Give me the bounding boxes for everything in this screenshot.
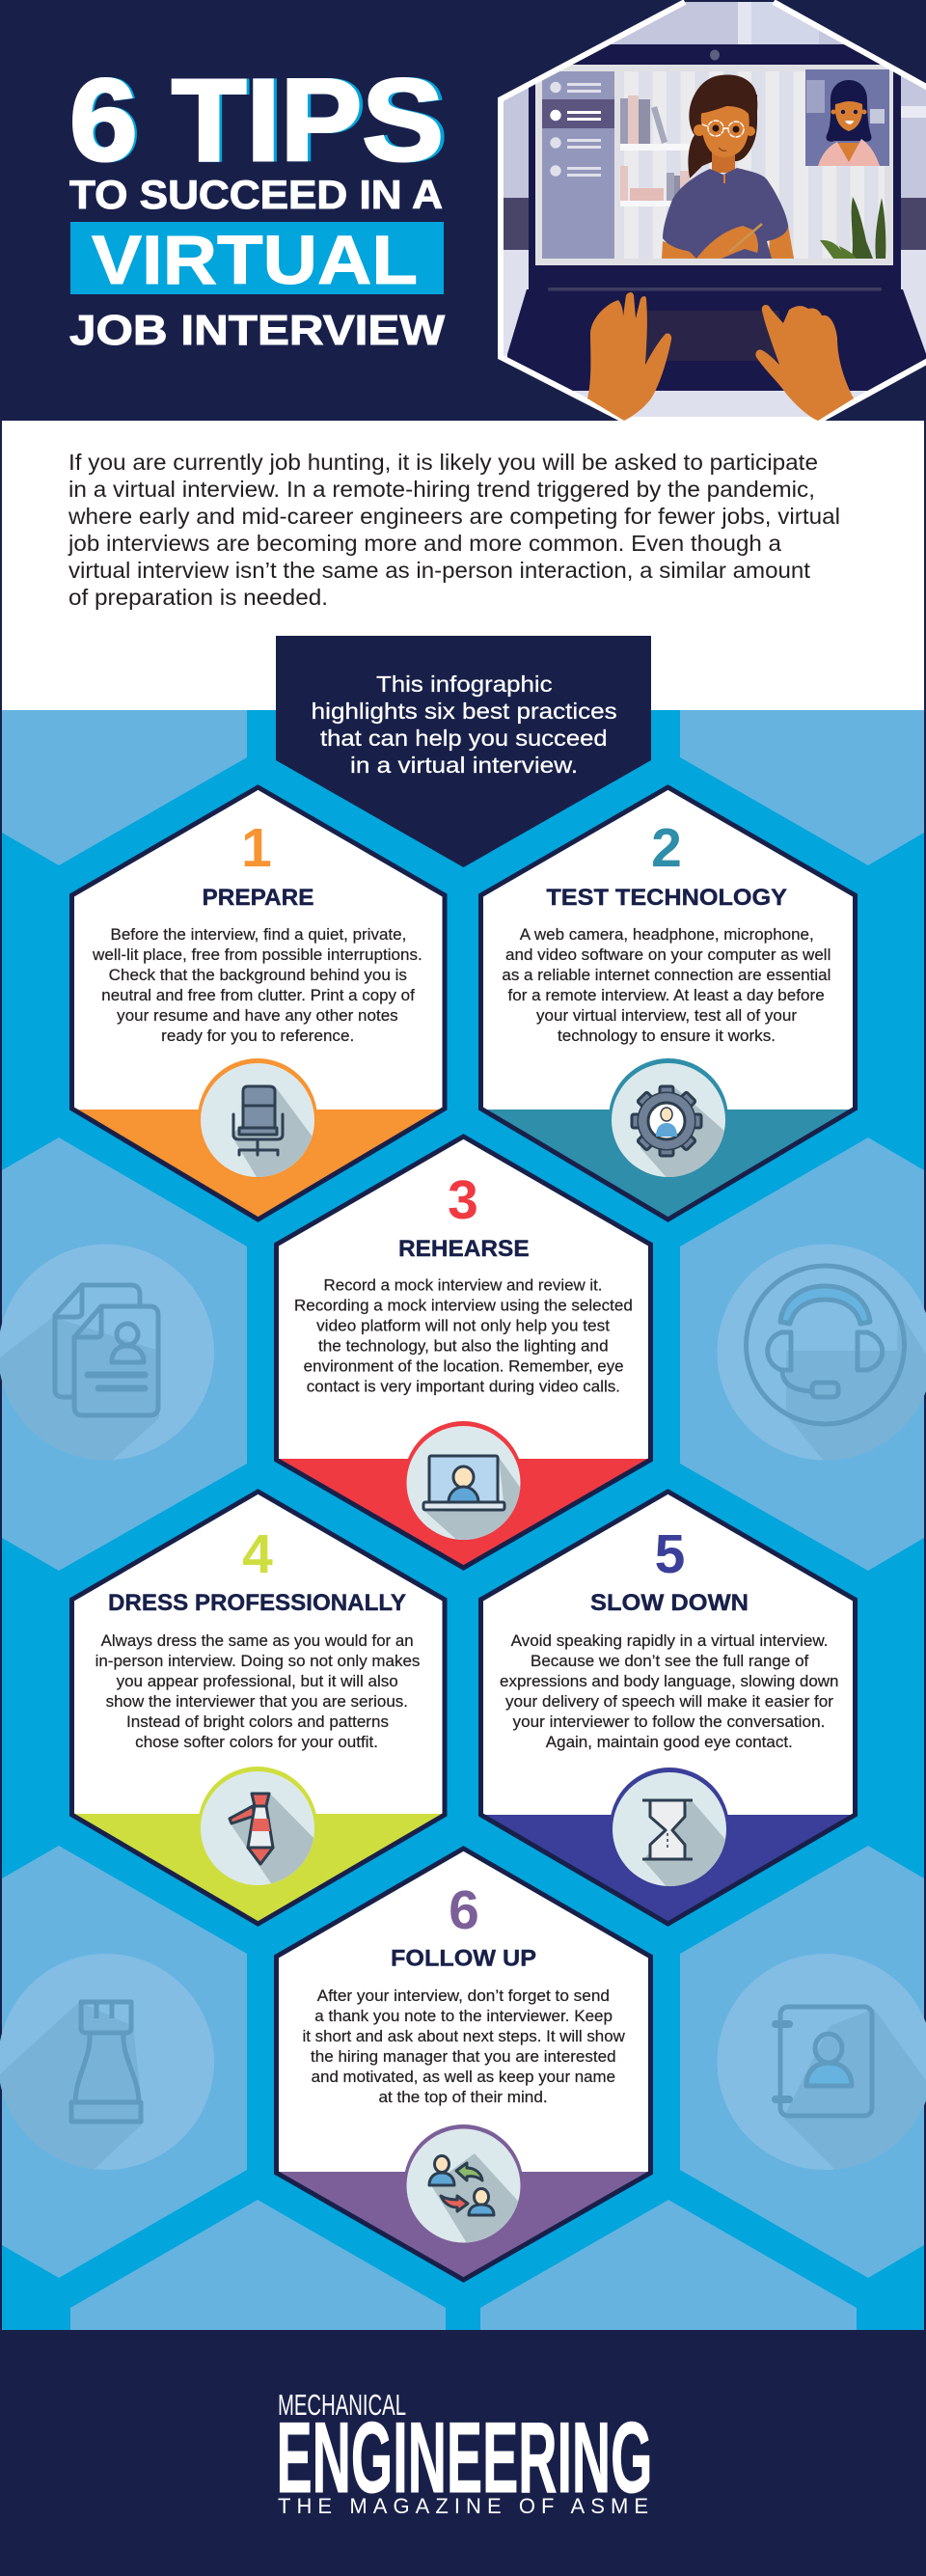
intro paragraph: virtual interview isn’t the same as in-person interaction, a similar amount (68, 558, 811, 583)
heading: DRESS PROFESSIONALLY (108, 1590, 406, 1616)
body text: Instead of bright colors and patterns (126, 1713, 389, 1731)
body text (303, 1987, 625, 2106)
body text: Again, maintain good eye contact. (546, 1734, 793, 1751)
body text: contact is very important during video calls. (307, 1379, 620, 1396)
body text: Always dress the same as you would for an (101, 1632, 414, 1650)
panel: tip 1 prepare (71, 787, 445, 1219)
logo: mechanical engineering (276, 2388, 652, 2518)
body text (294, 1277, 633, 1396)
callout: pointer banner: in a virtual interview. (350, 753, 578, 778)
body text: it short and ask about next steps. It will show (303, 2028, 625, 2045)
body text: your resume and have any other notes (117, 1007, 398, 1025)
body text: Record a mock interview and review it. (324, 1277, 602, 1295)
body text: show the interviewer that you are serious. (106, 1693, 408, 1711)
body text: the technology, but also the lighting and (318, 1338, 609, 1356)
body text (95, 1632, 420, 1751)
body text: Before the interview, find a quiet, private, (110, 926, 406, 944)
icon: gear with person (632, 1086, 701, 1156)
body text: Avoid speaking rapidly in a virtual interview. (511, 1632, 828, 1650)
panel: tip 2 test technology (480, 787, 855, 1219)
body text: as a reliable internet connection are essential (502, 967, 831, 984)
intro paragraph: where early and mid-career engineers are competing for fewer jobs, virtual (68, 504, 840, 529)
panel: intro white area (2, 421, 924, 710)
body text: neutral and free from clutter. Print a copy of (101, 987, 415, 1004)
panel: tip 4 dress professionally (71, 1492, 445, 1924)
intro paragraph: of preparation is needed. (68, 585, 328, 610)
body text: a thank you note to the interviewer. Keep (314, 2008, 613, 2025)
body text: ready for you to reference. (161, 1028, 354, 1045)
logo line: tagline: THE MAGAZINE OF ASME (278, 2494, 648, 2518)
heading: TEST TECHNOLOGY (546, 885, 787, 911)
number 4: 4 (242, 1523, 273, 1585)
illustration: video call on laptop (501, 0, 926, 424)
callout: pointer banner: highlights six best practices (312, 699, 617, 724)
body text: Recording a mock interview using the selected (294, 1298, 633, 1315)
woman main (688, 74, 757, 178)
heading: PREPARE (203, 885, 314, 911)
body text: in-person interview. Doing so not only makes (95, 1653, 420, 1670)
plant (852, 197, 885, 259)
number 3: 3 (448, 1169, 478, 1231)
heading: REHEARSE (398, 1236, 530, 1262)
title line: job interview: JOB INTERVIEW (69, 307, 446, 354)
body text: your virtual interview, test all of your (536, 1007, 798, 1025)
title line: 6 TIPS: 6 TIPS (71, 54, 448, 185)
icon: documents background (0, 1245, 214, 1476)
icon: office chair (233, 1086, 283, 1155)
body text: video platform will not only help you test (316, 1318, 610, 1335)
panel: header band (0, 0, 926, 420)
body text: for a remote interview. At least a day before (507, 987, 825, 1004)
body text: your delivery of speech will make it easier for (505, 1693, 834, 1711)
body text: Because we don’t see the full range of (531, 1653, 809, 1670)
body text: your interviewer to follow the conversation. (513, 1713, 825, 1731)
panel: tip 3 rehearse (276, 1137, 650, 1568)
title line: 6 TIPS: 6 TIPS (69, 54, 444, 185)
body text (92, 926, 422, 1045)
number 6: 6 (449, 1879, 479, 1941)
icon: hands (587, 292, 854, 421)
body text: you appear professional, but it will also (117, 1673, 398, 1690)
icon: hourglass (642, 1800, 693, 1859)
title line: to succeed in a: TO SUCCEED IN A (69, 172, 443, 217)
callout: pointer banner (276, 636, 651, 867)
title (69, 54, 448, 354)
body text: environment of the location. Remember, eye (304, 1358, 624, 1376)
icon: necktie (230, 1794, 273, 1864)
body text: expressions and body language, slowing down (500, 1673, 839, 1690)
body text: chose softer colors for your outfit. (135, 1734, 378, 1751)
panel: tip 5 slow down (480, 1492, 855, 1924)
panel: tip 6 follow up (276, 1849, 650, 2280)
body text: After your interview, don’t forget to send (317, 1987, 610, 2005)
title box: virtual: VIRTUAL (92, 223, 418, 299)
body text: A web camera, headphone, microphone, (520, 926, 814, 944)
panel: blue honeycomb background (2, 710, 924, 2330)
icon: laptop with person (423, 1456, 504, 1510)
callout: pointer banner: that can help you succeed (320, 726, 608, 751)
body text: the hiring manager that you are interested (311, 2048, 616, 2066)
icon: exchange between people (429, 2155, 494, 2215)
logo line: mechanical: MECHANICAL (278, 2388, 406, 2422)
intro paragraph: in a virtual interview. In a remote-hiring trend triggered by the pandemic, (68, 477, 815, 502)
icon: address book background (718, 1954, 926, 2180)
intro paragraph: job interviews are becoming more and more common. Even though a (68, 531, 781, 556)
body text: well-lit place, free from possible interruptions. (92, 946, 422, 964)
inset video (805, 69, 889, 166)
body text: Check that the background behind you is (109, 967, 407, 984)
number 5: 5 (655, 1523, 685, 1585)
icon: headset background (718, 1245, 926, 1466)
intro paragraph (68, 450, 840, 610)
heading: SLOW DOWN (590, 1590, 749, 1616)
number 1: 1 (241, 817, 272, 879)
body text: technology to ensure it works. (558, 1028, 776, 1045)
intro paragraph: If you are currently job hunting, it is likely you will be asked to participate (68, 450, 818, 475)
callout: pointer banner: This infographic (376, 671, 552, 697)
body text: and motivated, as well as keep your name (312, 2069, 615, 2086)
body text (500, 1632, 839, 1751)
body text: and video software on your computer as well (505, 946, 831, 964)
number 2: 2 (651, 817, 682, 879)
body text (502, 926, 831, 1045)
heading: FOLLOW UP (391, 1945, 536, 1972)
body text: at the top of their mind. (378, 2089, 548, 2106)
icon: chess rook background (0, 1954, 214, 2180)
